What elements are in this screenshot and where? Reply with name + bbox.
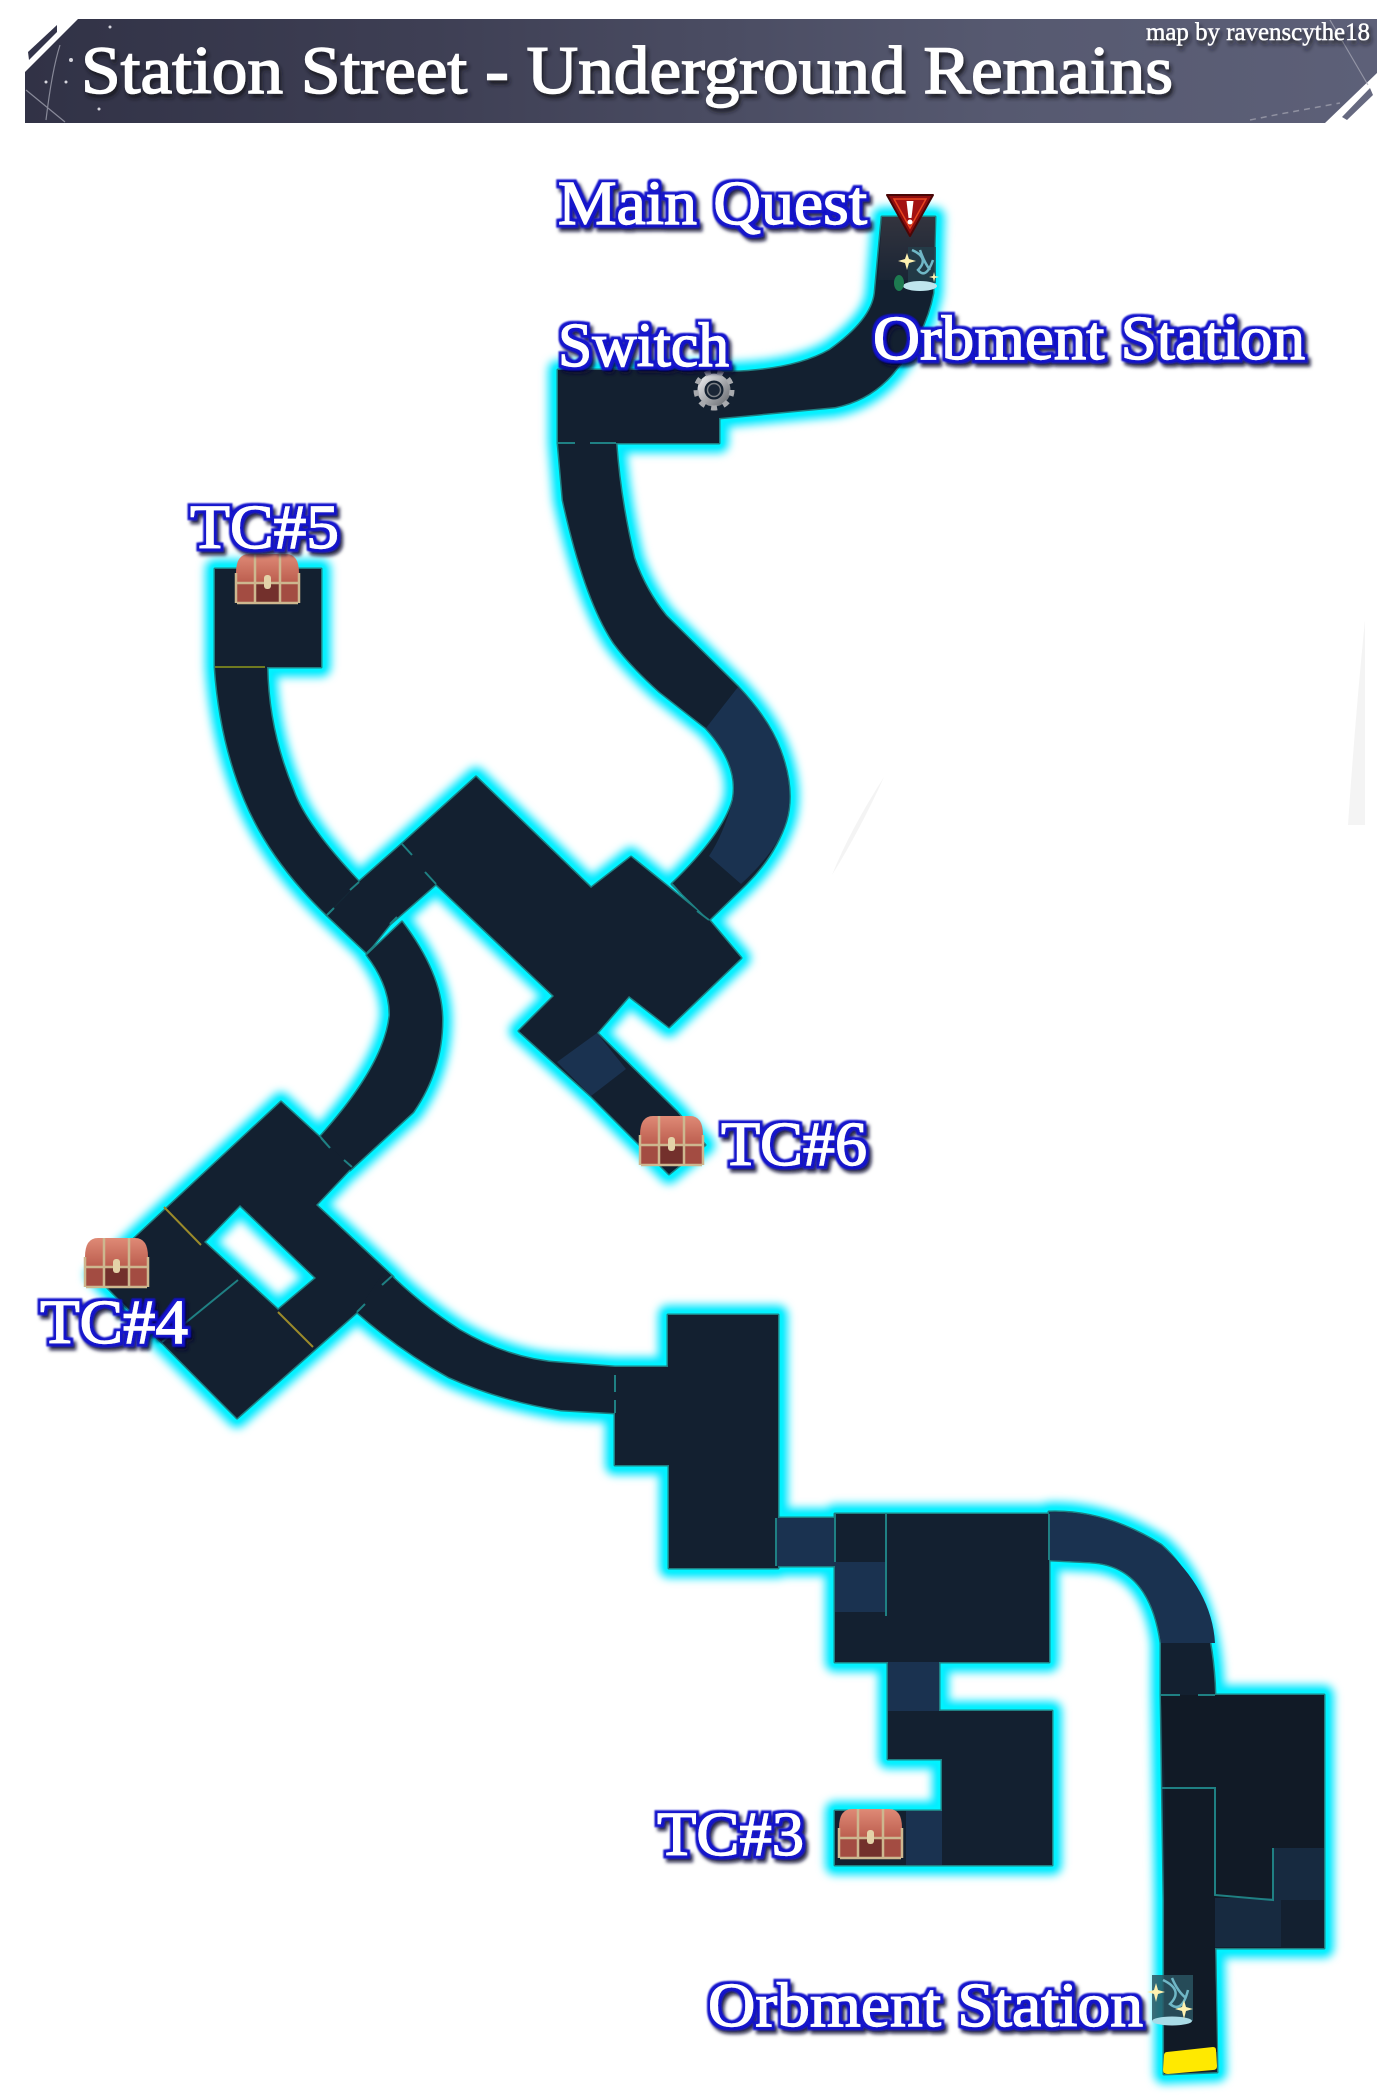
icon: main quest marker — [887, 195, 933, 236]
icon: chest TC3 — [839, 1809, 902, 1858]
icon: orbment station bottom — [1147, 1975, 1193, 2026]
icon: orbment station top — [894, 247, 939, 291]
lighter floor sections — [557, 687, 1324, 1947]
title banner — [25, 19, 1377, 123]
icon: switch gear — [696, 372, 732, 408]
label: TC#6: TC#6 — [721, 1111, 867, 1179]
corridor end shade — [878, 217, 935, 280]
label: Orbment Station top: Orbment Station — [873, 305, 1305, 373]
label: TC#3: TC#3 — [657, 1801, 804, 1869]
icon: chest TC5 — [236, 554, 299, 603]
faint background marks — [832, 620, 1365, 875]
credit text: map by ravenscythe18 — [1146, 19, 1370, 46]
label: Orbment Station bottom: Orbment Station — [708, 1972, 1143, 2040]
icon: chest TC6 — [640, 1116, 703, 1165]
label: TC#4: TC#4 — [40, 1289, 188, 1357]
label: TC#5: TC#5 — [190, 494, 339, 562]
label: Switch: Switch — [558, 312, 729, 380]
door lines — [162, 443, 1273, 1900]
dungeon map — [95, 217, 1324, 2074]
dark lower room — [1161, 1695, 1324, 2056]
icon: chest TC4 — [85, 1238, 148, 1287]
label: Main Quest: Main Quest — [558, 170, 867, 238]
title text: Station Street - Underground Remains — [81, 32, 1173, 108]
exit marker — [1163, 2047, 1217, 2074]
